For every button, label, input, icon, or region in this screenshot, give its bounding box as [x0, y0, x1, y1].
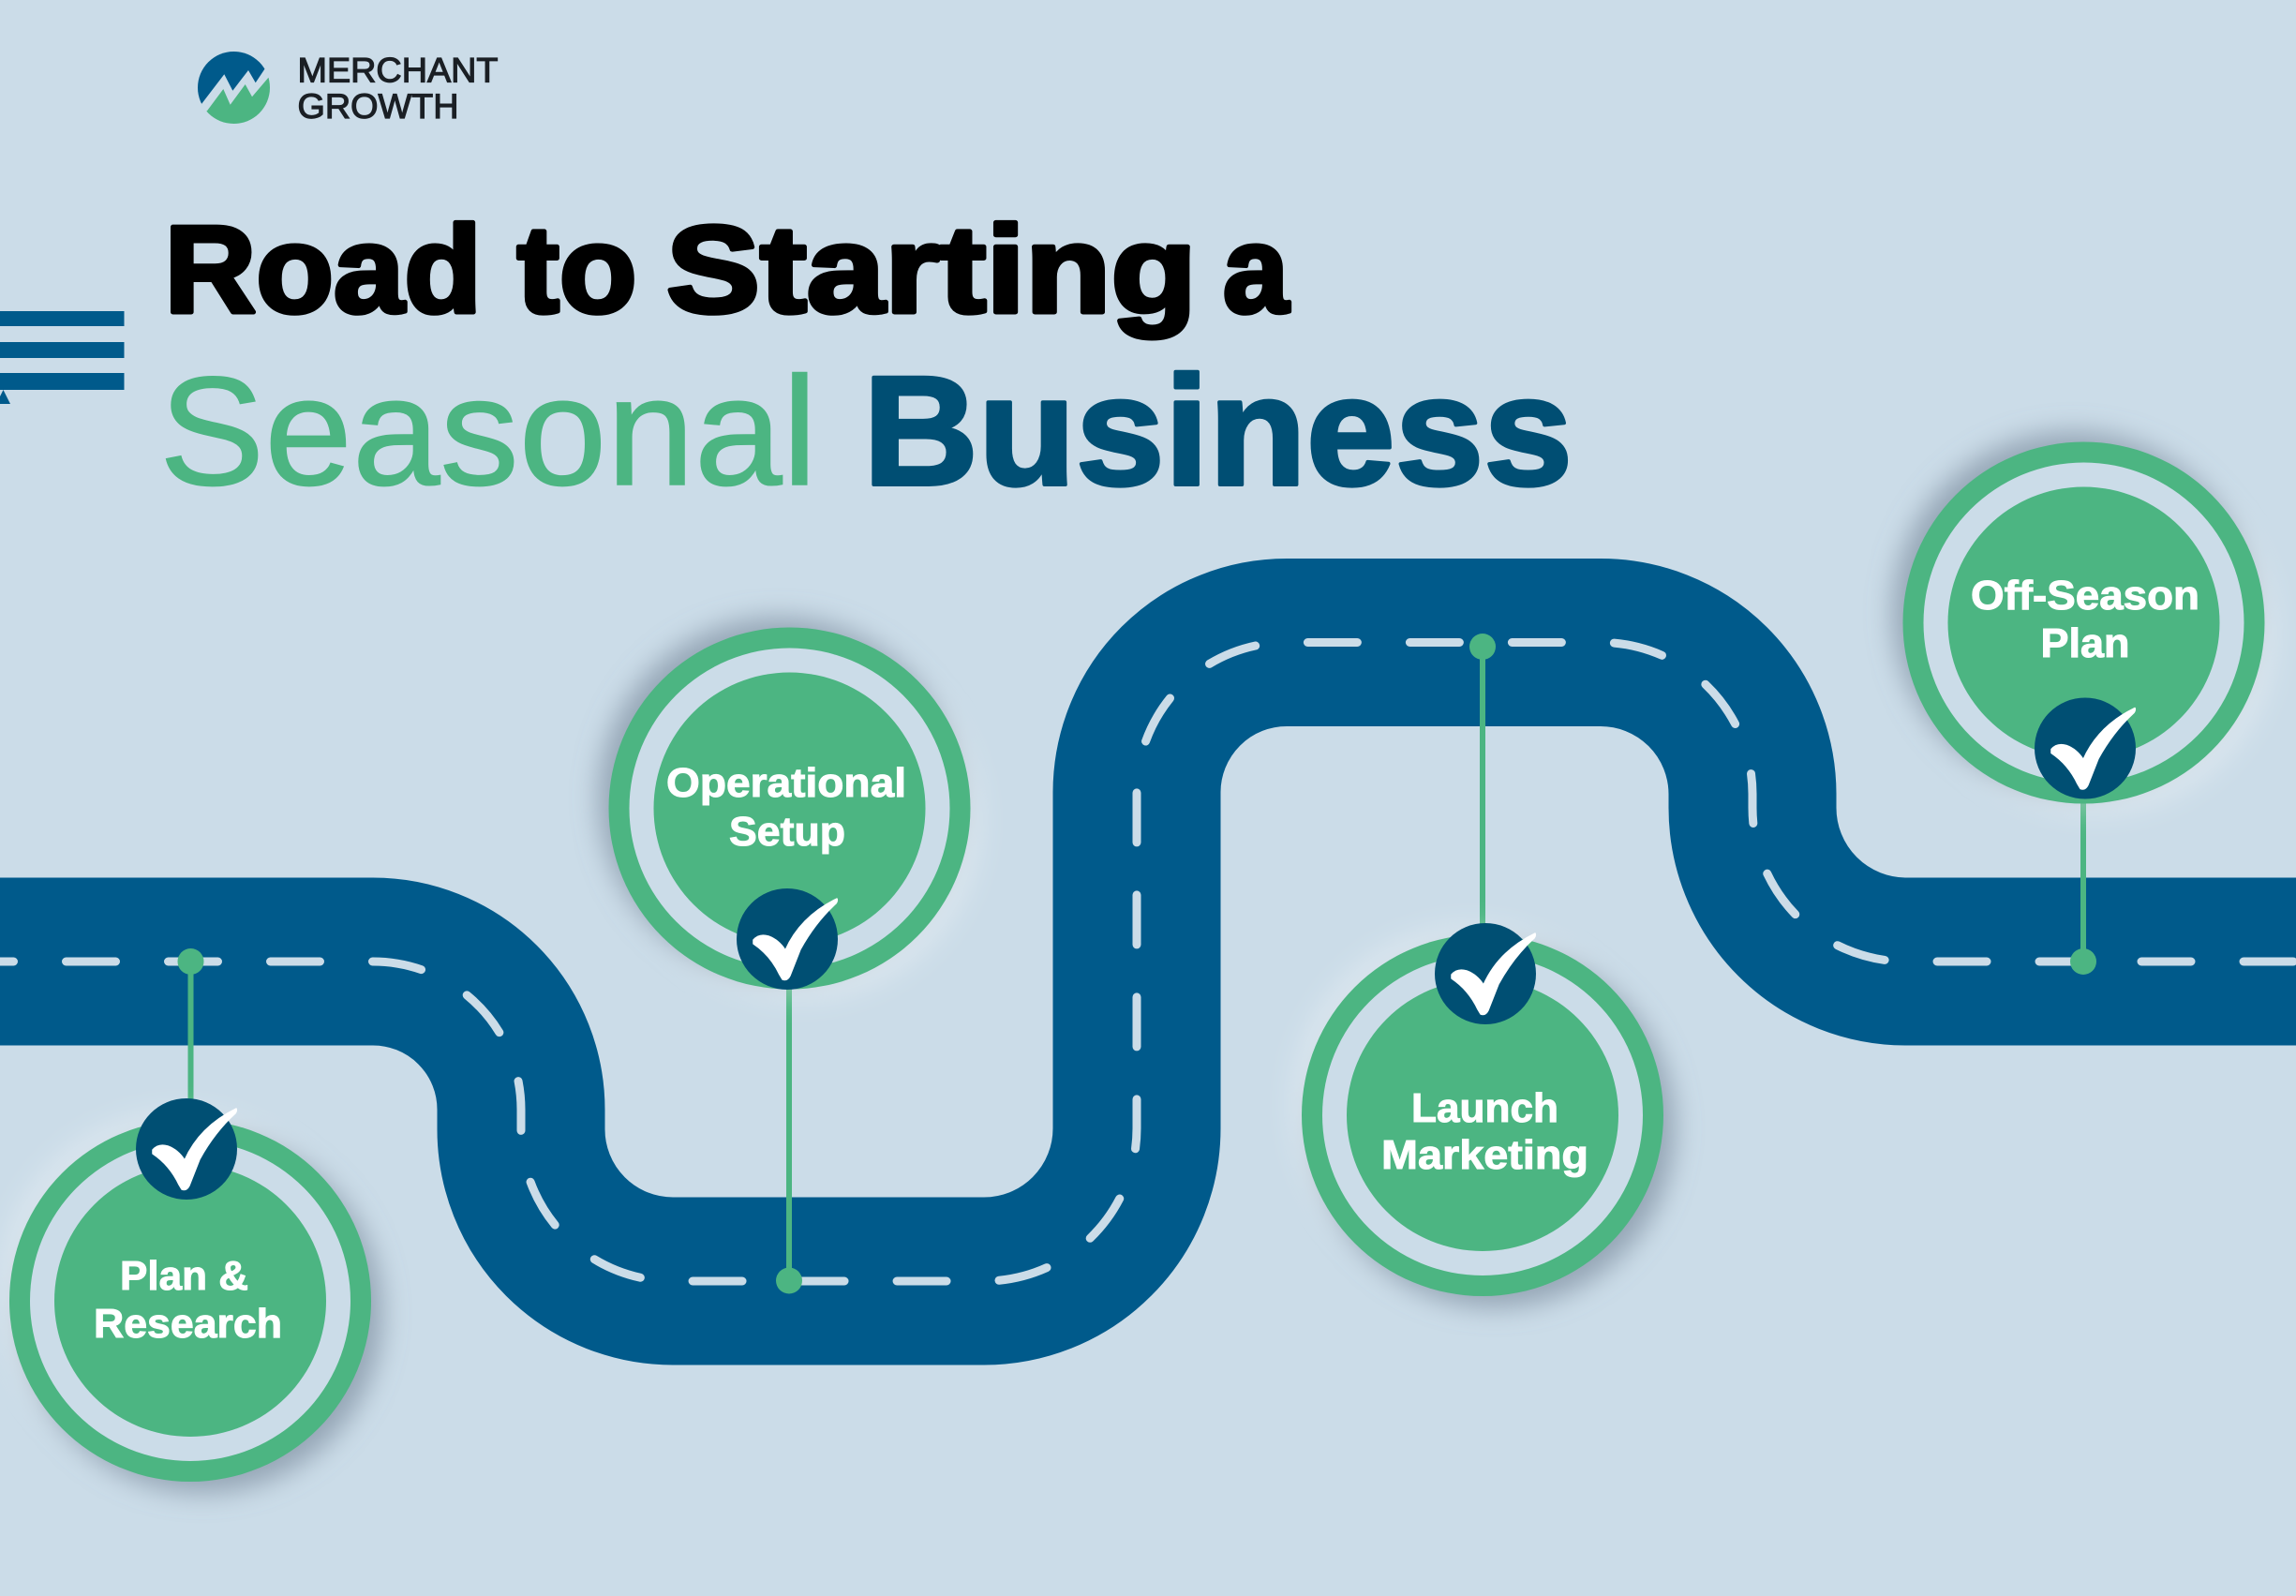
label: Setup	[729, 809, 845, 855]
check badge	[136, 1098, 237, 1200]
label: Marketing	[1381, 1132, 1588, 1178]
inner disc	[54, 1165, 326, 1437]
check badge	[1435, 923, 1536, 1024]
label: Launch	[1411, 1085, 1558, 1131]
label: Off-Season	[1971, 573, 2199, 619]
connector line and road pin	[1469, 634, 1496, 937]
title line 1	[165, 201, 1290, 338]
winding road	[0, 643, 2296, 1281]
logo wordmark: GROWTH	[298, 87, 459, 126]
outer ring	[609, 628, 971, 990]
title line 1: Road to	[165, 201, 637, 338]
check badge	[2035, 697, 2136, 798]
outer ring	[1302, 934, 1663, 1296]
label: Plan &	[120, 1253, 248, 1299]
shadow	[0, 1111, 382, 1493]
title	[159, 201, 1573, 518]
decorative stripes at left edge	[0, 311, 124, 404]
label: Plan	[2041, 620, 2129, 666]
shadow	[1893, 432, 2274, 813]
label: Research	[94, 1301, 282, 1347]
road centre dashes	[0, 643, 2296, 1281]
check badge	[737, 888, 838, 990]
light ring	[1322, 955, 1643, 1275]
outer ring	[9, 1120, 371, 1482]
logo icon	[198, 52, 270, 124]
label	[94, 1253, 282, 1347]
connector line and road pin	[178, 948, 204, 1111]
road surface	[0, 643, 2296, 1281]
label: Operational	[666, 760, 906, 806]
step 3: Launch Marketing	[1292, 634, 1675, 1307]
title line 1: a	[1223, 201, 1290, 338]
title line 2 emphasis: Business	[863, 345, 1573, 518]
light ring	[1923, 463, 2244, 783]
connector line and road pin	[776, 975, 802, 1293]
connector line and road pin	[2070, 787, 2096, 975]
inner disc	[1947, 487, 2219, 759]
light ring	[630, 649, 950, 969]
inner disc	[654, 673, 926, 945]
label	[1971, 573, 2199, 666]
label	[1381, 1085, 1588, 1178]
logo: Merchant Growth	[198, 52, 499, 124]
step 1: Plan & Research	[0, 948, 382, 1493]
light ring	[30, 1141, 350, 1461]
step 4: Off-Season Plan	[1893, 432, 2274, 975]
shadow	[1292, 926, 1675, 1307]
title line 1: Starting	[666, 201, 1197, 338]
label	[666, 760, 906, 855]
outer ring	[1902, 442, 2264, 804]
inner disc	[1347, 979, 1618, 1251]
logo wordmark: MERCHANT	[298, 51, 499, 89]
title line 2: Seasonal	[159, 345, 817, 517]
logo wordmark	[298, 51, 499, 126]
step 2: Operational Setup	[599, 618, 980, 1293]
shadow	[599, 618, 980, 999]
